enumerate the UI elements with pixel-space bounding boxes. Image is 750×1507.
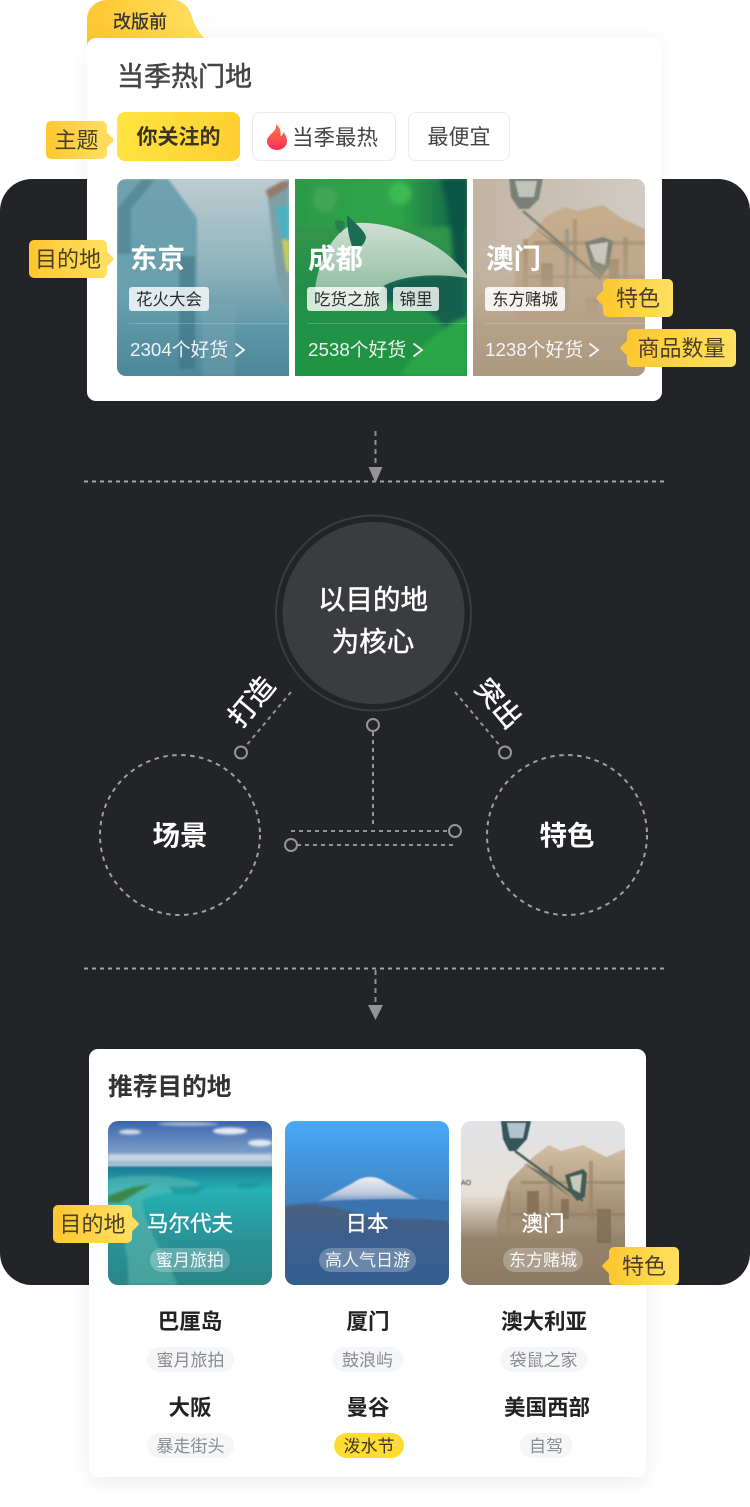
tag: water festival: 泼水节 [344, 1437, 394, 1456]
tab: cheapest: 最便宜 [428, 126, 490, 149]
destination: Bangkok: 曼谷 [346, 1396, 390, 1420]
city name: 马尔代夫 [147, 1212, 233, 1236]
heading: hot destinations: 当季热门地 [117, 62, 252, 92]
callout: item count: 商品数量 [637, 336, 726, 361]
destination: Bali: 巴厘岛 [158, 1310, 222, 1334]
feature pill: 高人气日游 [325, 1251, 410, 1270]
tab: following: 你关注的 [136, 126, 220, 149]
destination: Australia: 澳大利亚 [501, 1310, 587, 1334]
photo: Japan [285, 1121, 449, 1285]
destination: Xiamen: 厦门 [346, 1310, 390, 1334]
tag: water festival [334, 1433, 404, 1458]
callout: theme: 主题 [54, 128, 98, 153]
rotated label: highlight: 突出 [469, 673, 528, 735]
panel: dark background [0, 179, 750, 1285]
tag: honeymoon [147, 1347, 234, 1372]
feature pill: 东方赌城 [509, 1251, 577, 1270]
diagram: arrow and divider top [84, 431, 664, 483]
feature text: 特色 [540, 820, 594, 851]
callout: destination [29, 240, 107, 278]
item count: 2304个好货 [130, 339, 228, 360]
card: Chengdu [295, 179, 467, 376]
divider [485, 323, 645, 324]
callout: destination: 目的地 [35, 247, 101, 272]
tag: self drive: 自驾 [529, 1437, 563, 1456]
card: Macau [473, 179, 645, 376]
card: Tokyo [117, 179, 289, 376]
scene text: 场景 [152, 820, 208, 851]
photo: Maldives [108, 1121, 272, 1285]
feature tag [307, 287, 387, 311]
photo: Macau [461, 1121, 625, 1285]
feature tag: 花火大会 [136, 291, 202, 309]
card: Japan [285, 1121, 449, 1285]
card: Maldives [108, 1121, 272, 1285]
city name: 澳门 [521, 1212, 564, 1236]
photo: Tokyo [117, 179, 289, 376]
feature pill [503, 1248, 583, 1272]
callout: item count [627, 329, 736, 367]
tag: self drive [520, 1433, 572, 1458]
callout: feature [609, 1247, 679, 1285]
photo: Macau [473, 179, 645, 376]
core text [318, 584, 428, 657]
icon: chevron [413, 342, 424, 358]
tag: kangaroo home [500, 1347, 587, 1372]
tag: honeymoon: 蜜月旅拍 [156, 1351, 224, 1370]
city name: 成都 [308, 243, 363, 274]
divider [307, 323, 467, 324]
icon: flame [267, 124, 287, 150]
feature tag: 东方赌城 [492, 291, 558, 309]
destination: Osaka: 大阪 [168, 1396, 212, 1420]
feature tag: 锦里 [400, 291, 432, 309]
feature tag: 吃货之旅 [314, 291, 380, 309]
core text: 以目的地 [318, 584, 428, 615]
tag: Gulangyu [332, 1347, 403, 1372]
callout: feature: 特色 [616, 286, 660, 311]
feature pill [150, 1248, 230, 1272]
rotated label: build: 打造 [222, 671, 281, 733]
connector nodes [235, 719, 511, 851]
dashed circle: scene [100, 755, 260, 915]
core text: 为核心 [332, 626, 414, 657]
diagram: destination core relationship [99, 514, 648, 916]
panel: recommended destinations card [89, 1049, 646, 1477]
core circle [276, 516, 471, 710]
tab: hottest [252, 112, 396, 161]
card: Macau [461, 1121, 625, 1285]
diagram: arrow and divider bottom [84, 968, 664, 1020]
callout: feature [603, 279, 673, 317]
city name: 东京 [130, 243, 185, 274]
tab: cheapest [408, 112, 510, 161]
item count: 1238个好货 [485, 339, 583, 360]
feature tag [485, 287, 565, 311]
tab: before redesign [87, 0, 204, 47]
tag: street walk [147, 1433, 234, 1458]
feature pill: 蜜月旅拍 [156, 1251, 224, 1270]
icon: chevron [235, 342, 246, 358]
feature tag [129, 287, 209, 311]
dashed circle: feature [487, 755, 647, 915]
callout: theme [46, 121, 107, 159]
heading: recommended destinations: 推荐目的地 [108, 1074, 231, 1101]
tag: Gulangyu: 鼓浪屿 [342, 1351, 393, 1370]
tag: street walk: 暴走街头 [156, 1437, 224, 1456]
divider [129, 323, 289, 324]
tag: kangaroo home: 袋鼠之家 [510, 1351, 578, 1370]
tab label: 当季最热 [292, 126, 378, 150]
callout: destination [53, 1205, 132, 1243]
callout: feature: 特色 [622, 1254, 666, 1279]
destination: US West: 美国西部 [504, 1396, 590, 1420]
connectors [245, 692, 501, 845]
callout: destination: 目的地 [59, 1212, 126, 1237]
city name: 澳门 [486, 243, 541, 274]
item count: 2538个好货 [308, 339, 406, 360]
city name: 日本 [345, 1212, 388, 1236]
panel: before redesign card [87, 38, 662, 401]
photo: Chengdu [295, 179, 467, 376]
feature tag [393, 287, 439, 311]
icon: chevron [589, 342, 600, 358]
feature pill [319, 1248, 416, 1272]
tab: following [117, 112, 240, 161]
photo: Macau: AO [461, 1180, 472, 1187]
tab: before redesign: 改版前 [113, 12, 167, 32]
